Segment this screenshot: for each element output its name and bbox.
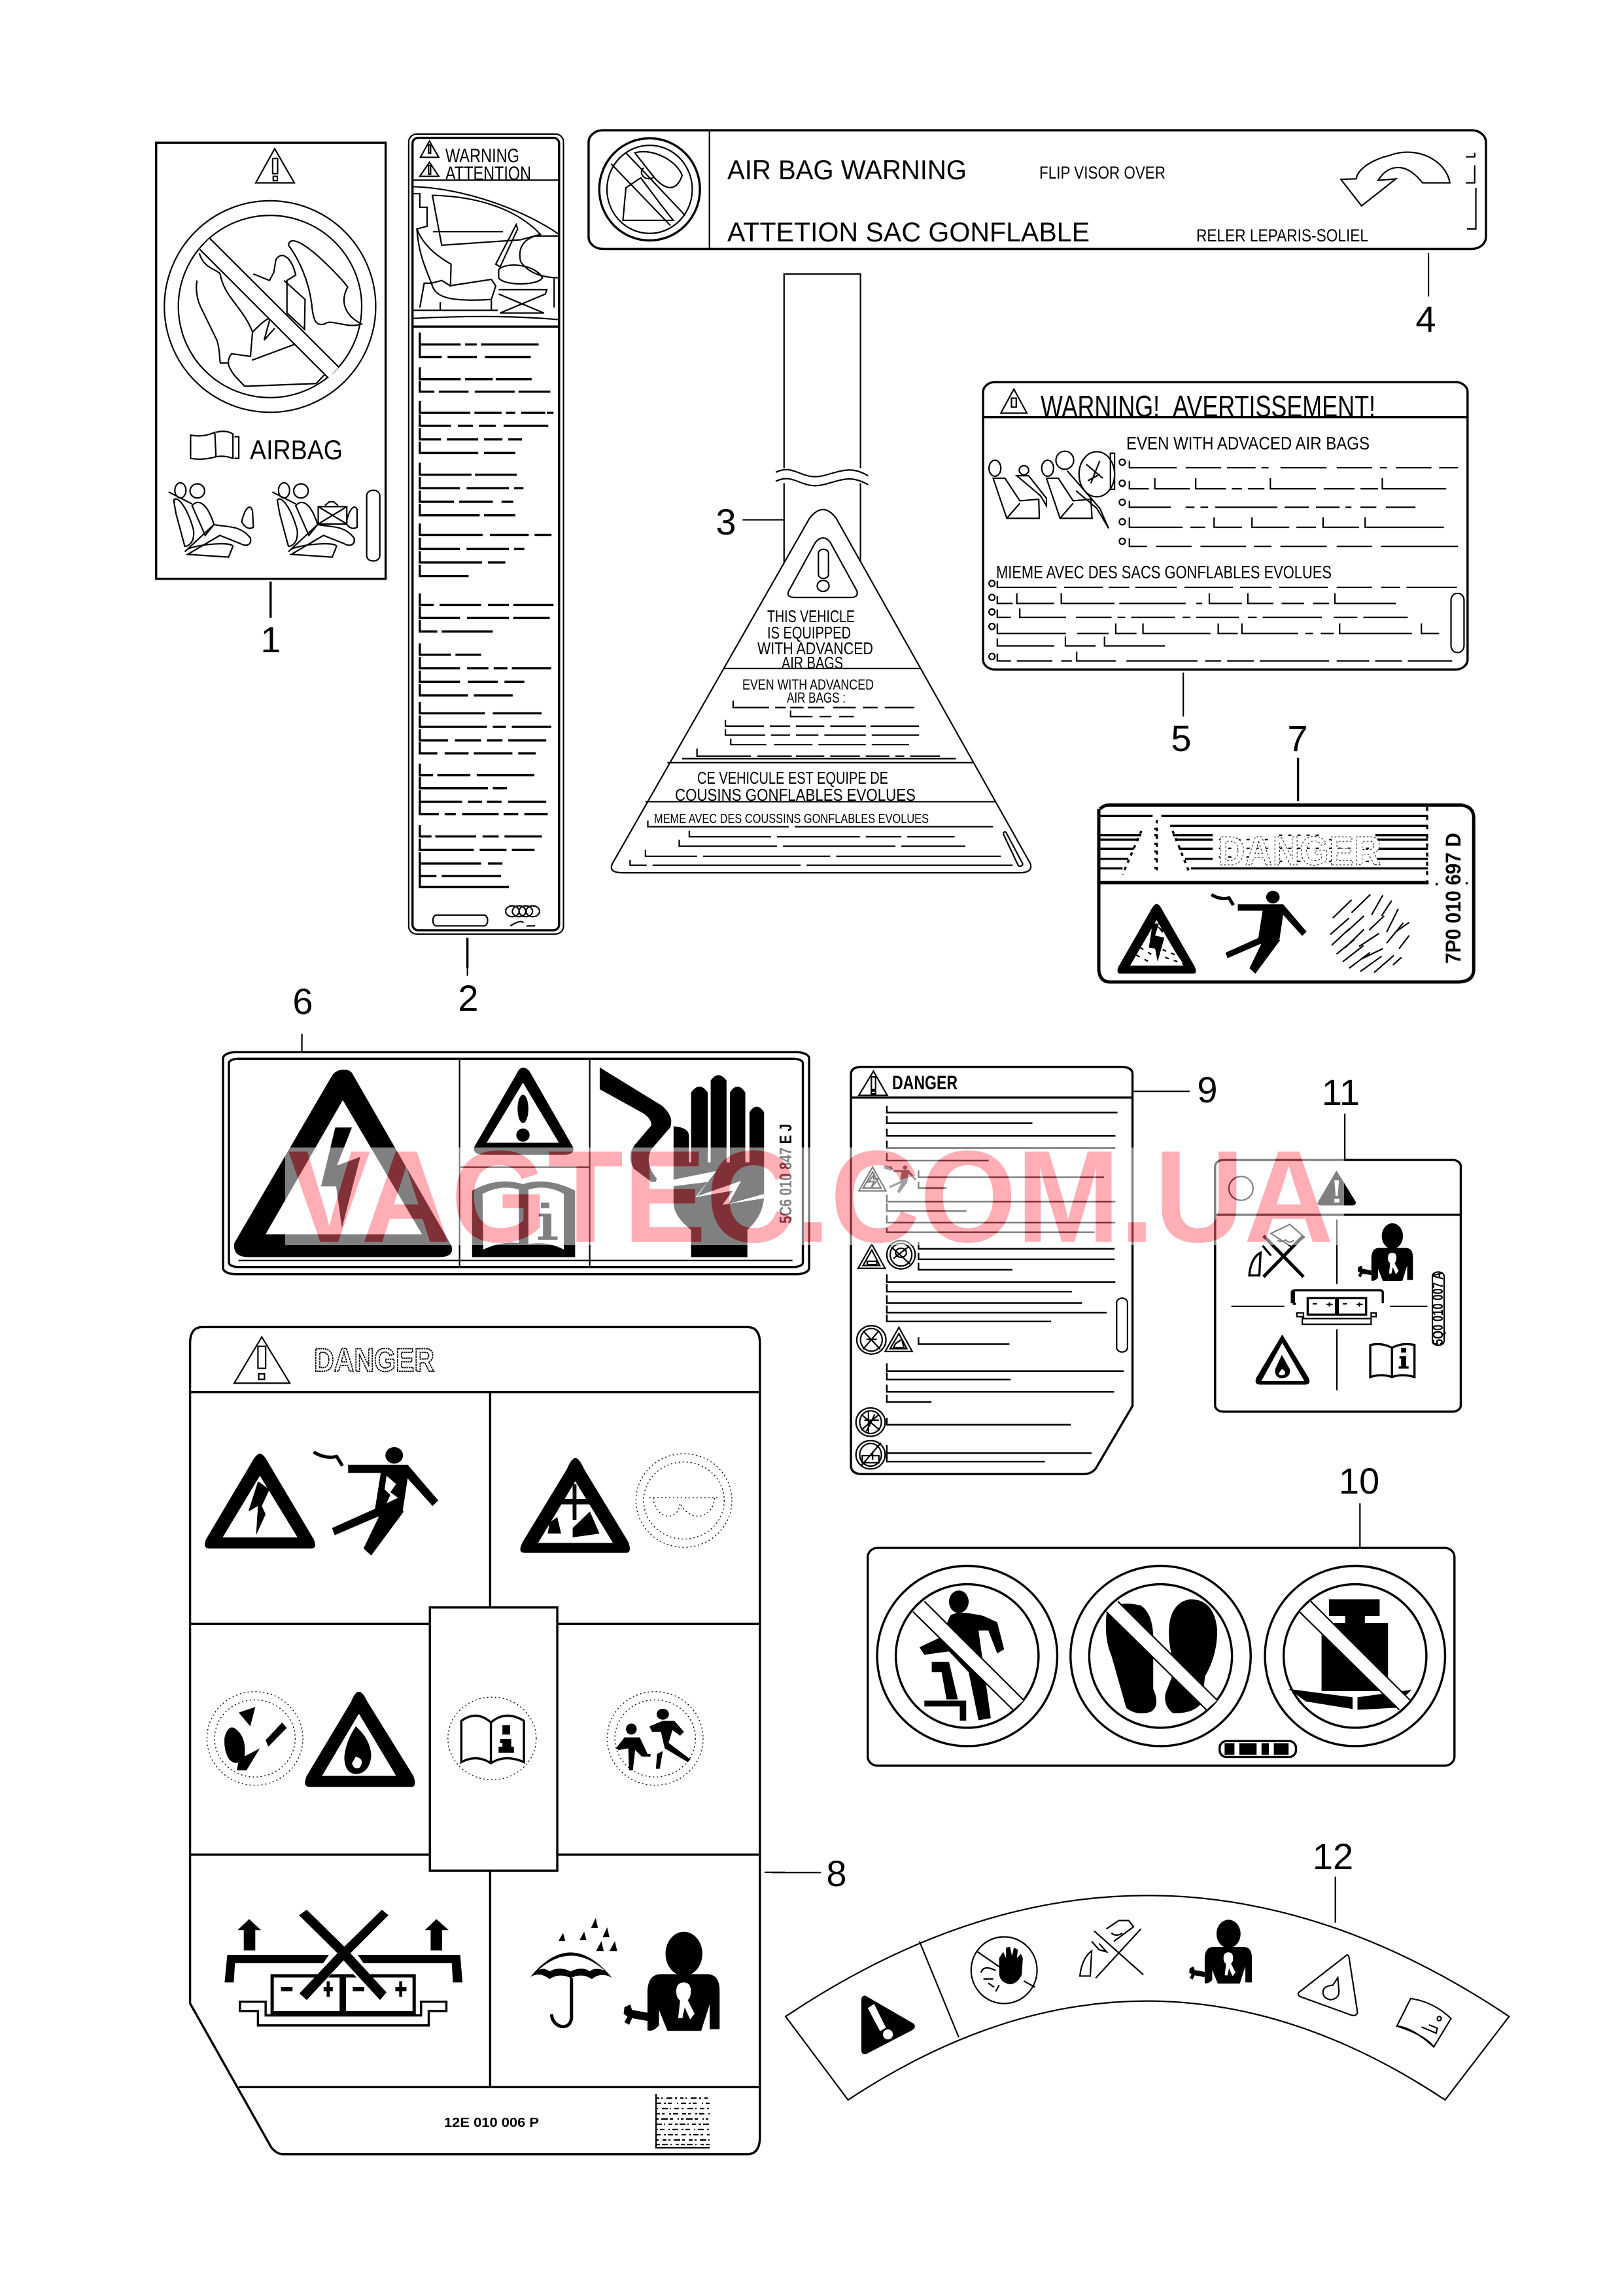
icon: no flame and flammable xyxy=(207,1692,415,1787)
text: attention heading: ATTENTION xyxy=(445,163,531,184)
icon: umbrella keep dry xyxy=(530,1918,719,2031)
text: flip visor over: FLIP VISOR OVER xyxy=(1039,163,1166,183)
number 7: 7 xyxy=(1287,718,1308,759)
number 8: 8 xyxy=(826,1853,847,1894)
number 11: 11 xyxy=(1322,1072,1360,1113)
label 4 artwork xyxy=(589,130,1486,296)
text: AIRBAG: AIRBAG xyxy=(250,434,343,465)
label 11 artwork xyxy=(1215,1113,1460,1412)
number 2: 2 xyxy=(458,977,479,1019)
pictograms xyxy=(205,1447,732,2031)
label 12 artwork xyxy=(772,1872,1509,2100)
text: part number 5C6 010 847 E J: 5C6 010 847 E J xyxy=(776,1124,795,1223)
panel: label 2 warning attention xyxy=(409,134,564,1019)
panel: label 9 danger text sheet xyxy=(851,1067,1218,1474)
text: warning avertissement heading: WARNING! AVERTISSEMENT! xyxy=(1041,389,1375,423)
number 5: 5 xyxy=(1171,718,1192,759)
number 1: 1 xyxy=(260,619,281,660)
panel: label 3 triangular hang tag xyxy=(612,274,1031,873)
number 4: 4 xyxy=(1415,298,1436,340)
data matrix code xyxy=(656,2094,710,2148)
text: danger outlined: DANGER xyxy=(314,1342,434,1378)
label 1 artwork xyxy=(156,143,386,618)
text: air bag warning: AIR BAG WARNING xyxy=(727,154,967,185)
text: this vehicle is equipped: WITH ADVANCED xyxy=(757,639,873,658)
text: even with advanced air bags: AIR BAGS : xyxy=(787,690,846,706)
label 2 artwork xyxy=(409,134,564,976)
panel: label 5 warning avertissement xyxy=(983,382,1468,759)
text: this vehicle is equipped: THIS VEHICLE xyxy=(767,606,855,626)
label 5 artwork xyxy=(983,382,1468,716)
text: even with advaced air bags: EVEN WITH ADVACED AIR BAGS xyxy=(1126,433,1370,453)
number 12: 12 xyxy=(1313,1836,1353,1877)
text: mieme avec des sacs gonflables: MIEME AVEC DES SACS GONFLABLES EVOLUES xyxy=(996,562,1332,582)
text: even with advanced air bags xyxy=(742,676,874,706)
icon: corrosive warning and goggles xyxy=(520,1454,732,1553)
label 7 artwork xyxy=(1099,758,1474,982)
text: reler le pare-soleil: RELER LEPARIS-SOLIEL xyxy=(1196,226,1368,245)
text: even with advanced air bags: EVEN WITH ADVANCED xyxy=(742,676,874,693)
panel: label 4 sun visor air bag warning xyxy=(589,130,1486,340)
text: this vehicle is equipped: IS EQUIPPED xyxy=(767,623,851,642)
text: part number 5Q0 010 007 A: 5Q0 010 007 A xyxy=(1430,1272,1446,1345)
panel: label 7 danger high voltage xyxy=(1099,718,1474,982)
number 3: 3 xyxy=(716,501,736,542)
label 8 frame and grid xyxy=(190,1327,785,2154)
number 6: 6 xyxy=(292,981,313,1022)
label 6 artwork xyxy=(223,1034,809,1274)
icon: keep children away xyxy=(607,1692,703,1785)
text: ce vehicule est equipe xyxy=(675,768,916,805)
icon: battery lifting prohibited xyxy=(224,1910,462,2025)
text: part number 12E 010 006 P: 12E 010 006 P xyxy=(444,2116,539,2130)
label 3 tag outline and lines xyxy=(612,274,1031,873)
panel: label 6 high voltage sticker xyxy=(223,981,809,1274)
panel: label 8 danger pictograms xyxy=(190,1327,847,2154)
watermark: VAGTEC.COM.UA xyxy=(288,1124,1334,1270)
text: warning heading: WARNING xyxy=(445,145,519,167)
text: this vehicle is equipped xyxy=(757,606,873,673)
number 9: 9 xyxy=(1197,1069,1218,1110)
icon: electric shock xyxy=(205,1447,438,1556)
text: ce vehicule est equipe: COUSINS GONFLABLES EVOLUES xyxy=(675,785,916,805)
text: ce vehicule est equipe: CE VEHICULE EST EQUIPE DE xyxy=(697,768,888,788)
label 9 artwork xyxy=(851,1067,1190,1474)
text: meme avec des coussins: MEME AVEC DES COUSSINS GONFLABLES EVOLUES xyxy=(654,812,929,826)
text: this vehicle is equipped: AIR BAGS xyxy=(782,653,843,673)
panel: label 12 curved pictogram strip xyxy=(772,1836,1509,2100)
text: attetion sac gonflable: ATTETION SAC GONFLABLE xyxy=(727,217,1090,247)
panel: label 11 battery warning xyxy=(1215,1072,1460,1412)
label 10 artwork xyxy=(868,1503,1455,1766)
text: danger heading: DANGER xyxy=(892,1072,958,1094)
text: danger dotted: DANGER xyxy=(1218,829,1381,874)
number 10: 10 xyxy=(1339,1460,1379,1501)
panel: label 10 prohibition symbols xyxy=(868,1460,1455,1766)
panel: label 1 airbag warning xyxy=(156,143,386,660)
text: part number 7P0 010 697 D: 7P0 010 697 D xyxy=(1442,833,1465,964)
icon: read manual xyxy=(448,1697,536,1779)
